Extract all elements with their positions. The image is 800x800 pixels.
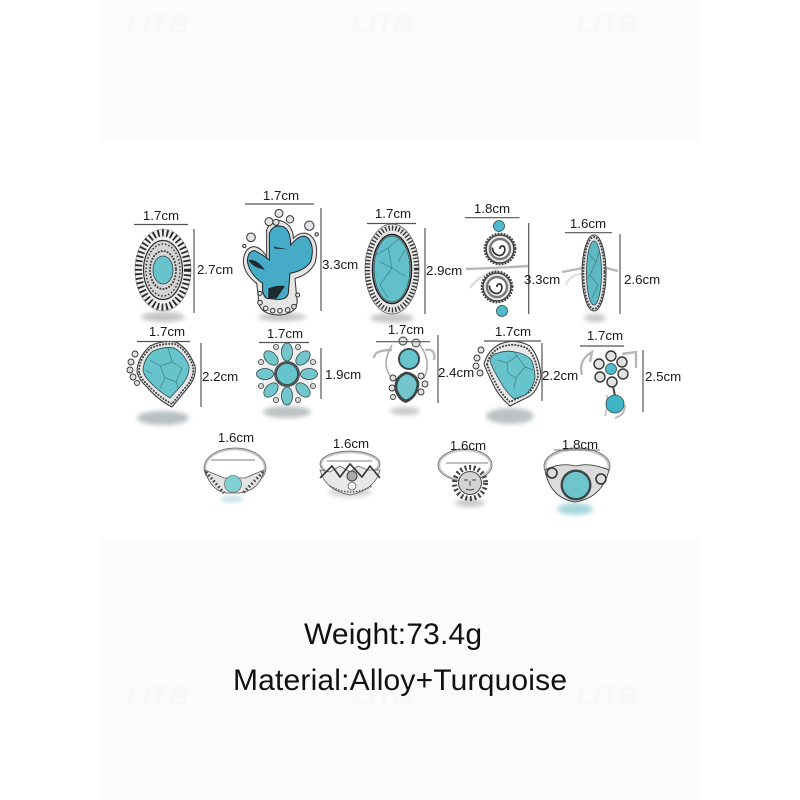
- watermarks: LITB: [126, 8, 188, 39]
- background panel: bottom tint: [100, 540, 700, 800]
- ring 9: rounded trapezoid: [473, 341, 541, 424]
- stones: [606, 364, 624, 413]
- ring 6 dimensions: [137, 324, 238, 407]
- ring 5: long oval: [562, 235, 618, 322]
- watermarks: LITB: [351, 680, 413, 711]
- text: weight: Weight:73.4g: [304, 618, 482, 651]
- ring 5 dimensions: [565, 216, 660, 314]
- stone: [490, 351, 535, 399]
- ring 1 dimensions: [134, 208, 233, 313]
- ring 10: flower with drop: [581, 351, 636, 418]
- watermarks: LITB: [126, 680, 188, 711]
- ring 8 dimensions: 1.7cm: [388, 322, 424, 337]
- watermarks: LITB: [576, 680, 638, 711]
- ring 3 dimensions: 2.9cm: [426, 263, 462, 278]
- stone: [586, 241, 602, 305]
- ring 4 dimensions: 1.8cm: [474, 201, 510, 216]
- ring 12 dimensions: 1.6cm: [333, 436, 369, 451]
- ring 9 dimensions: [484, 324, 578, 401]
- background panel: top tint: [100, 0, 700, 140]
- ring 7 dimensions: 1.9cm: [325, 367, 361, 382]
- ring 2: cactus: [243, 209, 318, 321]
- watermarks: [126, 8, 638, 711]
- ring 13 dimensions: [446, 438, 488, 463]
- ring 4 dimensions: 3.3cm: [524, 272, 560, 287]
- ring 9 dimensions: 1.7cm: [495, 324, 531, 339]
- ring 8 dimensions: 2.4cm: [438, 365, 474, 380]
- ring 3: large oval stone: [365, 224, 419, 323]
- ring 9 dimensions: 2.2cm: [542, 368, 578, 383]
- ring 2 dimensions: 3.3cm: [322, 257, 358, 272]
- ring 13 dimensions: 1.6cm: [450, 438, 486, 453]
- ring 10 dimensions: 1.7cm: [587, 328, 623, 343]
- ring 8 dimensions: [376, 322, 474, 403]
- ring 14: wide band round stone: [544, 448, 610, 515]
- ring 2 dimensions: [245, 188, 358, 311]
- ring 6 dimensions: 2.2cm: [202, 369, 238, 384]
- ring 13: sun face: [438, 449, 492, 507]
- stone: [224, 476, 242, 492]
- ring 6: rounded kite: [127, 342, 195, 425]
- ring 1 dimensions: 1.7cm: [143, 208, 179, 223]
- ring 5 dimensions: 2.6cm: [624, 272, 660, 287]
- ring 4 dimensions: [465, 201, 560, 314]
- ring 7 dimensions: [259, 326, 361, 399]
- ring 3 dimensions: [367, 206, 462, 314]
- watermarks: LITB: [351, 8, 413, 39]
- ring 7 dimensions: 1.7cm: [267, 326, 303, 341]
- ring 10 dimensions: 2.5cm: [645, 369, 681, 384]
- ring 1: oval sunburst: [135, 229, 191, 322]
- watermarks: LITB: [576, 8, 638, 39]
- ring 7: flower cluster: [256, 343, 318, 418]
- ring 14 dimensions: 1.8cm: [562, 437, 598, 452]
- stones: [494, 220, 508, 316]
- ring 10 dimensions: [580, 328, 681, 412]
- ring 11 dimensions: 1.6cm: [218, 430, 254, 445]
- petals: [256, 343, 318, 405]
- ring 6 dimensions: 1.7cm: [149, 324, 185, 339]
- stone: [374, 236, 410, 302]
- stone: [153, 256, 173, 284]
- ring 12: lotus band: [320, 451, 380, 497]
- center stone: [276, 364, 298, 384]
- stones: [397, 350, 418, 400]
- ring 4: double swirl: [466, 220, 528, 316]
- ring 3 dimensions: 1.7cm: [375, 206, 411, 221]
- ring 8: double stone: [374, 337, 434, 415]
- text: material: Material:Alloy+Turquoise: [233, 664, 567, 697]
- ring 11: leaf band with round stone: [204, 448, 266, 502]
- ring 2 dimensions: 1.7cm: [263, 188, 299, 203]
- ring 1 dimensions: 2.7cm: [197, 262, 233, 277]
- ring 5 dimensions: 1.6cm: [570, 216, 606, 231]
- ring 11 dimensions: [211, 430, 255, 460]
- stone: [562, 472, 590, 498]
- ring 12 dimensions: [327, 436, 372, 461]
- stone: [143, 347, 189, 398]
